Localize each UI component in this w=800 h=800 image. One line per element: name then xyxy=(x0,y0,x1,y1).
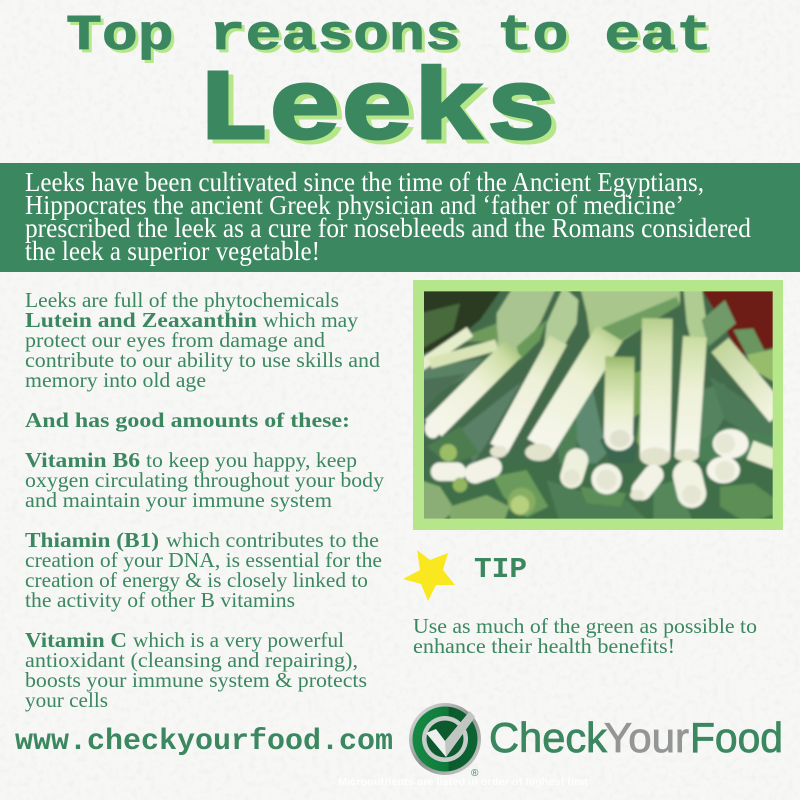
intro text: Hippocrates the ancient Greek physician and ‘father of medicine’ xyxy=(25,190,684,220)
text block: Thiamin: Thiamin (B1) xyxy=(25,528,159,552)
footnote: faint white text: Micronutrients are listed in order of highest first xyxy=(338,777,589,788)
main stalks xyxy=(433,348,513,428)
logo wordmark: Your xyxy=(604,714,689,761)
text block: Thiamin: creation of energy & is closely linked to xyxy=(25,568,368,592)
text block: Vitamin B6 xyxy=(25,448,385,512)
cut leek with green core xyxy=(508,488,536,516)
registered mark: ® xyxy=(471,768,479,779)
logo wordmark: Food xyxy=(690,714,783,761)
cut ends xyxy=(425,418,441,438)
panel: intro banner xyxy=(0,163,800,272)
title: Top reasons to eat: Top reasons to eat xyxy=(66,8,712,65)
logo: CheckYourFood xyxy=(409,703,783,779)
photo illustration: pile of leeks xyxy=(420,287,778,523)
text block: Vitamin C: boosts your immune system & protects xyxy=(25,668,367,692)
foliage xyxy=(424,358,482,383)
text block: phytochemicals xyxy=(25,288,381,392)
text block: phytochemicals: Lutein and Zeaxanthin xyxy=(25,308,257,332)
intro text: prescribed the leek as a cure for nosebleeds and the Romans considered xyxy=(25,213,751,243)
panel: leek photo xyxy=(413,280,783,530)
text block: phytochemicals: contribute to our ability to use skills and xyxy=(25,348,381,372)
icon: check badge xyxy=(409,703,481,775)
front stalks xyxy=(440,444,457,500)
text block: Vitamin B6: Vitamin B6 xyxy=(25,448,140,472)
upper green tops xyxy=(497,287,557,357)
side stalks xyxy=(420,332,470,366)
text block: Vitamin C: which is a very powerful xyxy=(133,628,344,652)
text block: Vitamin C: your cells xyxy=(25,688,108,712)
logo wordmark: Check xyxy=(489,714,608,761)
intro text: the leek a superior vegetable! xyxy=(25,236,320,266)
text block: phytochemicals: which may xyxy=(263,308,359,332)
website url: www.checkyourfood.com xyxy=(15,725,393,759)
text block: phytochemicals: Leeks are full of the phytochemicals xyxy=(25,288,339,312)
intro text: Leeks have been cultivated since the time of the Ancient Egyptians, xyxy=(25,167,704,197)
title: Top reasons to eat: Top reasons to eat xyxy=(69,11,715,68)
text block: Vitamin B6: and maintain your immune system xyxy=(25,488,332,512)
text block: tip xyxy=(413,614,757,658)
text block: Vitamin C: antioxidant (cleansing and repairing), xyxy=(25,648,358,672)
logo wordmark xyxy=(489,714,783,761)
text block: phytochemicals: protect our eyes from damage and xyxy=(25,328,326,352)
text block: Vitamin B6: to keep you happy, keep xyxy=(146,448,357,472)
text block: Thiamin xyxy=(25,528,382,612)
heading: TIP: TIP xyxy=(474,553,527,586)
text block: Vitamin B6: oxygen circulating throughout your body xyxy=(25,468,385,492)
title: Leeks: Leeks xyxy=(197,56,557,169)
intro text xyxy=(25,167,751,266)
text block: Thiamin: the activity of other B vitamins xyxy=(25,588,295,612)
heading: good amounts: And has good amounts of these: xyxy=(25,408,350,432)
icon: yellow star xyxy=(403,550,455,601)
text block: Vitamin C: Vitamin C xyxy=(25,628,127,652)
text block: phytochemicals: memory into old age xyxy=(25,368,206,392)
text block: Thiamin: which contributes to the xyxy=(166,528,379,552)
text block: tip: Use as much of the green as possible to xyxy=(413,614,757,638)
title: Leeks: Leeks xyxy=(202,60,562,173)
text block: Vitamin C xyxy=(25,628,367,712)
text block: tip: enhance their health benefits! xyxy=(413,634,675,658)
text block: Thiamin: creation of your DNA, is essential for the xyxy=(25,548,382,572)
